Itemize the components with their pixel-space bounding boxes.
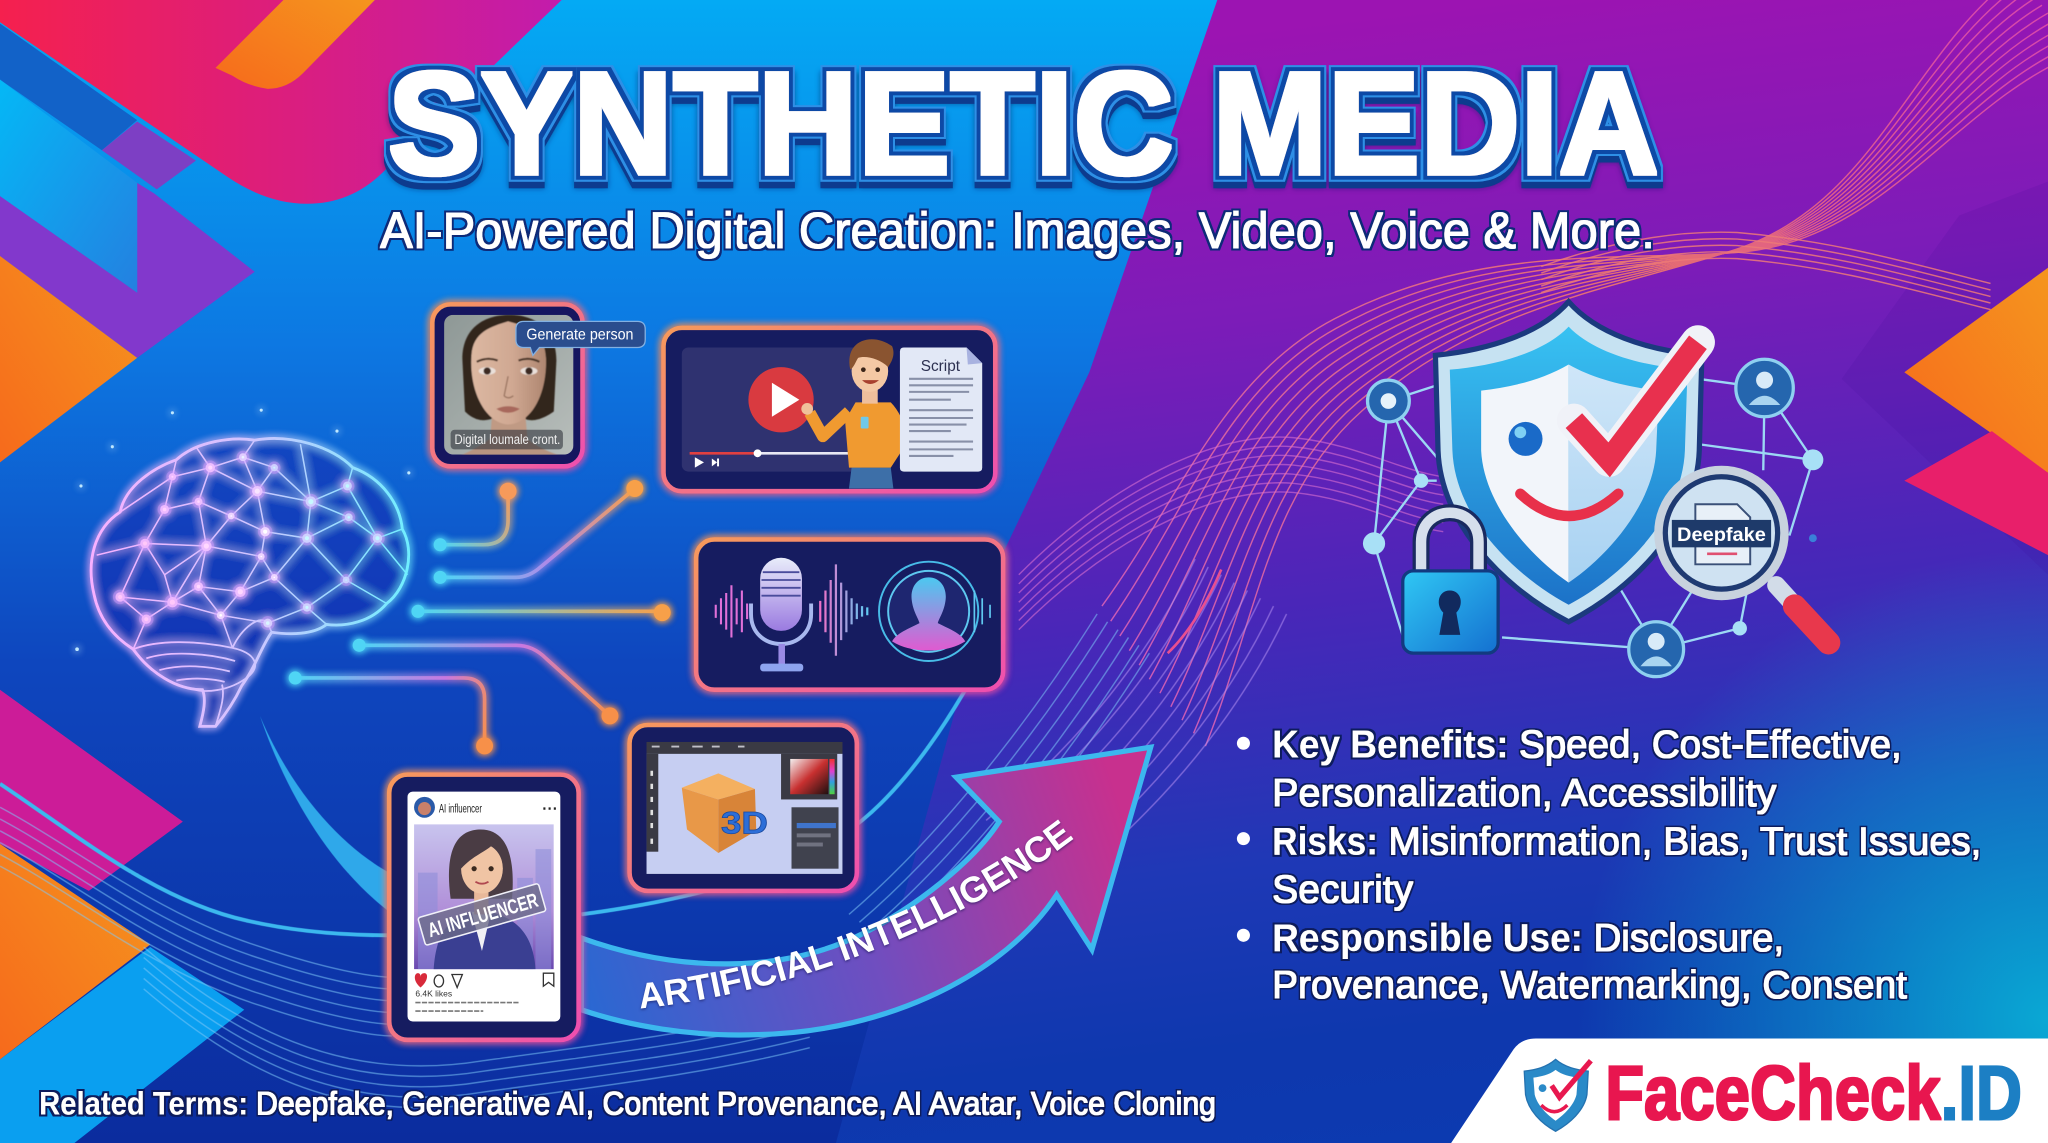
logo panel bbox=[1451, 1038, 2048, 1143]
bullet list bbox=[1237, 724, 1981, 1007]
cerebellum bbox=[133, 620, 268, 726]
caption: Digital loumale cront. bbox=[455, 432, 560, 447]
connector: brain to influencer card bbox=[289, 671, 493, 754]
portrait photo bbox=[444, 315, 573, 457]
AI influencer banner: AI INFLUENCER bbox=[425, 890, 541, 942]
3D cube bbox=[682, 773, 768, 853]
card: generated person image bbox=[432, 304, 645, 466]
bullet: responsible use: Disclosure, bbox=[1593, 917, 1784, 960]
card: 3D design bbox=[630, 725, 857, 891]
bullet: key benefits: Speed, Cost-Effective, bbox=[1519, 724, 1902, 767]
sound wave left bbox=[716, 585, 747, 637]
post caption: 6.4K likes bbox=[415, 989, 452, 999]
decorative shapes: top left bbox=[0, 0, 562, 462]
arrow: artificial intelligence: ARTIFICIAL INTELLIGENCE bbox=[640, 820, 1074, 1011]
card: voice cloning bbox=[696, 539, 1003, 690]
speech bubble: Generate person bbox=[526, 327, 633, 344]
decorative shapes: bottom left bbox=[0, 690, 244, 1143]
related terms: Related Terms: bbox=[39, 1085, 248, 1121]
AI influencer banner bbox=[418, 883, 546, 945]
subtitle: AI-Powered Digital Creation: Images, Video, Voice & More. bbox=[380, 202, 1655, 259]
bullet: responsible use: Provenance, Watermarking, Consent bbox=[1272, 964, 1907, 1007]
bullet: responsible use: Responsible Use: bbox=[1272, 917, 1583, 960]
title: SYNTHETIC MEDIA bbox=[388, 43, 1659, 206]
script document bbox=[900, 347, 982, 472]
bullet: key benefits: Key Benefits: bbox=[1272, 724, 1509, 767]
magnifying glass bbox=[1659, 470, 1829, 643]
decorative shapes: right bbox=[1904, 268, 2048, 555]
logo wordmark: FaceCheck.ID bbox=[1605, 1050, 2022, 1136]
play button bbox=[748, 367, 814, 432]
related terms: Deepfake, Generative AI, Content Provenance, AI Avatar, Voice Cloning bbox=[256, 1085, 1216, 1121]
card: AI influencer post bbox=[389, 775, 579, 1040]
swoosh tail and cyan curves bbox=[0, 627, 999, 935]
bullet: risks: Security bbox=[1272, 869, 1414, 912]
magnifying glass: Deepfake bbox=[1677, 524, 1766, 546]
post header: AI influencer bbox=[439, 802, 482, 816]
connector: brain to voice card bbox=[411, 604, 671, 621]
connector: brain to 3D card bbox=[353, 639, 618, 724]
network links bbox=[1374, 379, 1813, 649]
brain bbox=[75, 409, 410, 726]
bullet: key benefits: Personalization, Accessibility bbox=[1272, 772, 1777, 815]
bullet: responsible use bbox=[1237, 917, 1907, 1007]
star particles bbox=[75, 409, 410, 651]
sound wave middle bbox=[820, 564, 867, 656]
bullet: key benefits bbox=[1237, 724, 1902, 815]
card: AI video bbox=[664, 328, 995, 491]
voice avatar bbox=[879, 562, 990, 661]
neural mesh bbox=[97, 440, 408, 649]
padlock bbox=[1403, 513, 1498, 653]
connector lines bbox=[289, 480, 671, 754]
avatar illustration bbox=[414, 824, 554, 969]
post header bbox=[414, 797, 556, 818]
connector: brain to video card bbox=[434, 480, 643, 584]
bullet: risks: Misinformation, Bias, Trust Issues, bbox=[1388, 820, 1981, 863]
editor window bbox=[647, 742, 842, 874]
arrow: artificial intelligence bbox=[581, 707, 1191, 1038]
caption bbox=[451, 430, 563, 449]
progress bar bbox=[690, 449, 856, 468]
bullet: risks bbox=[1237, 820, 1981, 912]
microphone bbox=[751, 558, 811, 671]
connector: brain to image card bbox=[434, 483, 517, 551]
post caption bbox=[415, 989, 519, 1011]
script document: Script bbox=[921, 358, 961, 375]
brain outline bbox=[91, 439, 409, 726]
3D cube: 3D bbox=[721, 805, 768, 840]
network nodes bbox=[1363, 359, 1823, 677]
speech bubble bbox=[516, 321, 645, 355]
presenter bbox=[801, 339, 908, 489]
check mark bbox=[1574, 342, 1698, 460]
security illustration bbox=[1363, 302, 1829, 677]
post actions bbox=[415, 973, 554, 988]
neural nodes bbox=[115, 453, 382, 628]
shield bbox=[1435, 302, 1702, 622]
logo shield icon bbox=[1524, 1059, 1591, 1131]
bullet: risks: Risks: bbox=[1272, 820, 1378, 863]
